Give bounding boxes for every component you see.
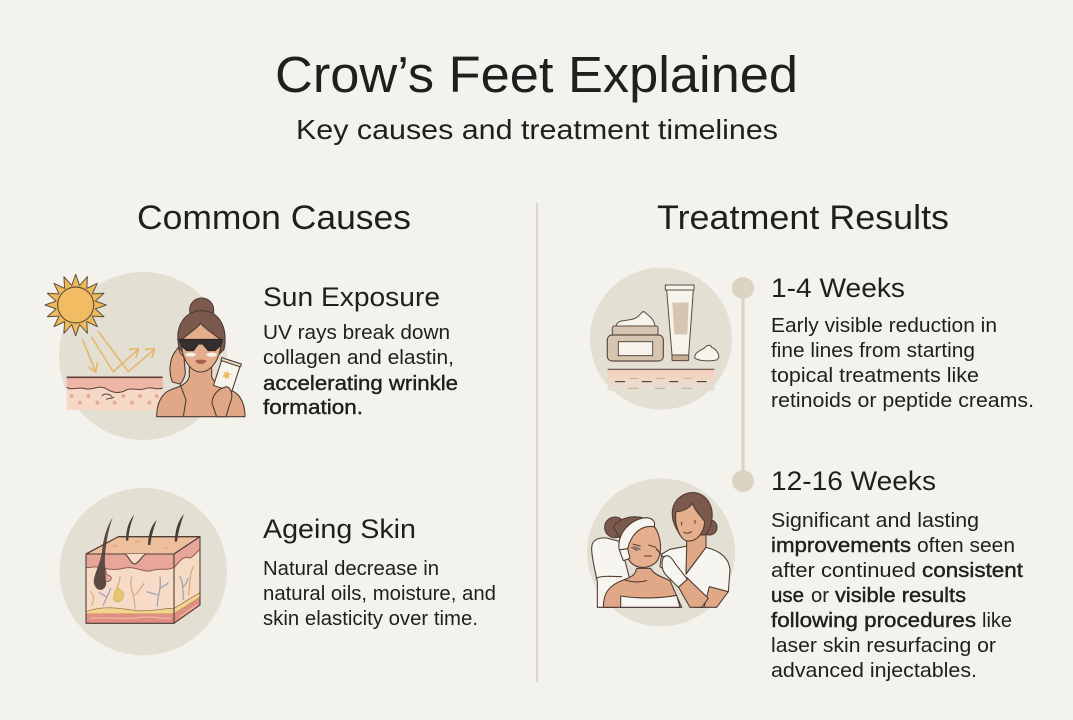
- cause: sun exposure text: collagen and elastin,: [263, 347, 454, 369]
- skin layers: [67, 377, 163, 410]
- cause: sun exposure text: Sun Exposure: [263, 282, 440, 312]
- cause: sun exposure text: UV rays break down: [263, 322, 450, 344]
- result: 1-4 weeks text: 1-4 Weeks: [771, 273, 905, 303]
- cause: sun exposure text: [263, 282, 458, 419]
- figure: woman with sunglasses: [157, 298, 245, 417]
- result: 12-16 weeks text: improvements: [771, 535, 911, 557]
- illustration: sun exposure: [45, 272, 245, 440]
- cause: sun exposure text: formation.: [263, 397, 363, 419]
- result: 12-16 weeks text: visible results: [835, 585, 966, 607]
- icon: cream dollop: [695, 345, 719, 361]
- figure: practitioner: [656, 493, 730, 607]
- cause: ageing skin text: Natural decrease in: [263, 558, 439, 580]
- result: 12-16 weeks text: use: [771, 585, 804, 607]
- result: 12-16 weeks text: like: [982, 610, 1012, 632]
- icon: cream jar: [607, 312, 663, 361]
- subtitle: Key causes and treatment timelines: [296, 114, 778, 145]
- icon: tube: [665, 285, 694, 361]
- title: Crow’s Feet Explained: [275, 46, 798, 103]
- cause: ageing skin text: natural oils, moisture, and: [263, 583, 496, 605]
- result: 12-16 weeks text: after continued: [771, 560, 916, 582]
- cause: ageing skin text: skin elasticity over time.: [263, 608, 478, 630]
- illustration: topical creams: [590, 268, 732, 410]
- result: 12-16 weeks text: or: [811, 585, 829, 607]
- heading: common causes: Common Causes: [137, 199, 411, 237]
- result: 1-4 weeks text: retinoids or peptide creams.: [771, 390, 1034, 412]
- result: 12-16 weeks text: advanced injectables.: [771, 660, 977, 682]
- skin cube: [86, 514, 200, 623]
- timeline: [732, 277, 754, 492]
- result: 1-4 weeks text: topical treatments like: [771, 365, 979, 387]
- result: 12-16 weeks text: Significant and lasting: [771, 510, 979, 532]
- result: 12-16 weeks text: 12-16 Weeks: [771, 466, 936, 496]
- result: 12-16 weeks text: following procedures: [771, 610, 976, 632]
- result: 1-4 weeks text: fine lines from starting: [771, 340, 975, 362]
- result: 1-4 weeks text: [771, 273, 1034, 412]
- result: 12-16 weeks text: consistent: [922, 560, 1023, 582]
- arrows: uv rays: [83, 332, 155, 372]
- illustration: ageing skin cross-section: [60, 488, 227, 655]
- result: 1-4 weeks text: Early visible reduction in: [771, 315, 997, 337]
- cause: sun exposure text: accelerating wrinkle: [263, 373, 458, 395]
- illustration: clinical procedure: [587, 478, 735, 626]
- cause: ageing skin text: [263, 514, 496, 630]
- result: 12-16 weeks text: often seen: [917, 535, 1015, 557]
- panel: common causes: [45, 199, 496, 655]
- heading: treatment results: Treatment Results: [657, 199, 949, 237]
- figure: patient on chair: [592, 517, 682, 607]
- cause: ageing skin text: Ageing Skin: [263, 514, 416, 544]
- skin strip: [608, 369, 714, 391]
- result: 12-16 weeks text: [771, 466, 1023, 682]
- icon: sun: [45, 274, 106, 336]
- result: 12-16 weeks text: laser skin resurfacing or: [771, 635, 996, 657]
- panel: treatment results: [587, 199, 1034, 682]
